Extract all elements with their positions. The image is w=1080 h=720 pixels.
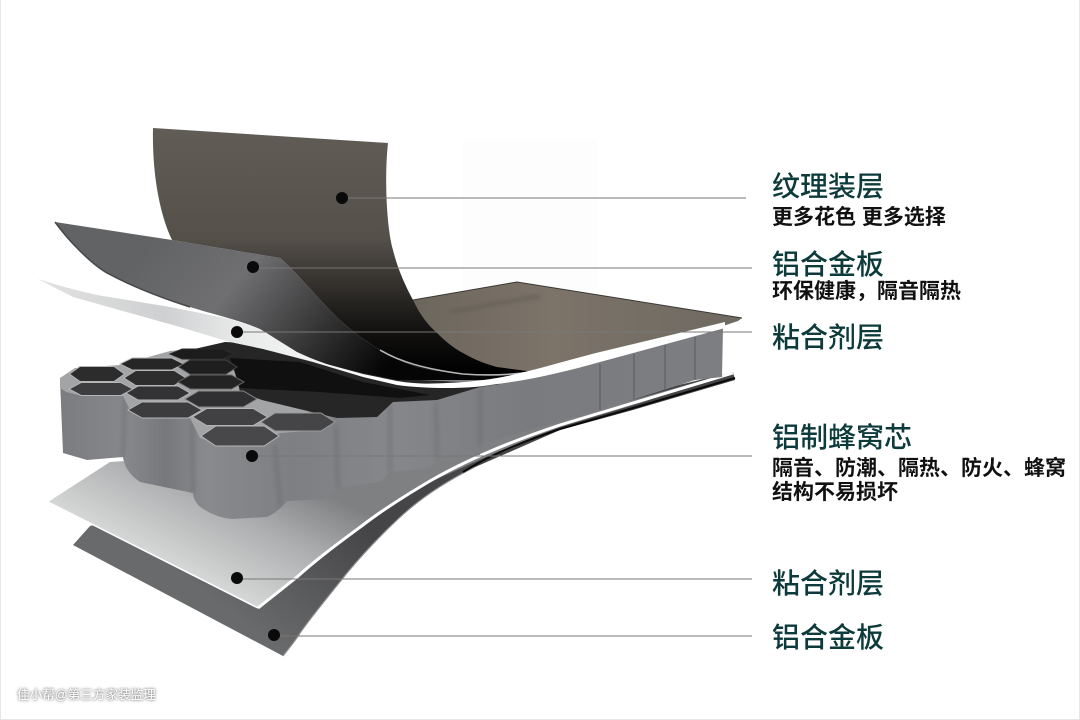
label: texture surface layer [772,171,946,229]
watermark: 佳小帮@第三方家装监理 [17,688,156,702]
sheet: lower aluminium panel [73,372,735,656]
core dark blobs [230,358,430,398]
core wall shadows [123,388,480,505]
core top surface: left cells base [60,345,323,446]
label: aluminium honeycomb core: 结构不易损坏 [772,481,898,504]
label: texture surface layer: 纹理装层 [772,171,884,202]
sheet: white adhesive band [38,279,725,388]
label: adhesive layer upper: 粘合剂层 [772,322,884,353]
label: aluminium honeycomb core: 隔音、防潮、隔热、防火、蜂窝 [772,457,1066,480]
label: aluminium alloy sheet lower: 铝合金板 [772,622,884,653]
sheet: upper aluminium panel [55,222,530,380]
callout leader lines [237,198,752,636]
callout dots [231,192,348,641]
faint background patch [463,140,597,290]
label: adhesive layer lower: 粘合剂层 [772,568,884,599]
label: aluminium alloy sheet [772,249,961,303]
honeycomb core [60,328,723,519]
core side walls [60,328,723,519]
core top surface: dark rear [190,342,500,418]
label: texture surface layer: 更多花色 更多选择 [772,206,946,229]
label: aluminium alloy sheet: 铝合金板 [772,249,884,280]
sheet: lower adhesive layer [48,372,733,608]
core seams at the right [600,337,695,410]
label: aluminium honeycomb core [772,422,1066,504]
label: aluminium honeycomb core: 铝制蜂窝芯 [772,422,912,453]
sheet: flat top surface [400,282,742,376]
sheet: textured top layer curling up [153,128,530,375]
hexagonal cells [69,349,335,446]
label: aluminium alloy sheet: 环保健康，隔音隔热 [772,280,961,303]
